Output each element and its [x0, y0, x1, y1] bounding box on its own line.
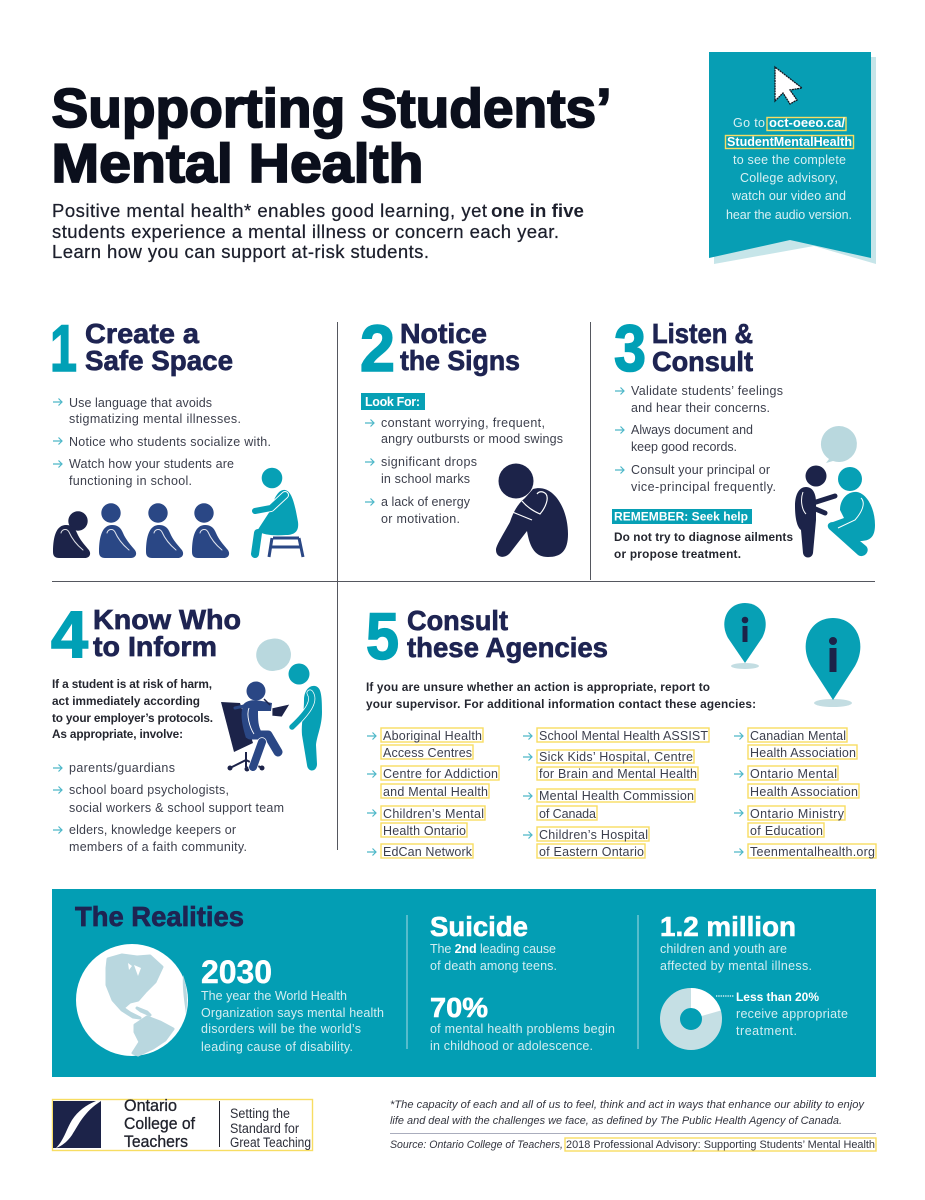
agency list column 1: EdCan Network	[383, 845, 473, 859]
logo: Ontario	[124, 1096, 177, 1115]
panel: 1 create a safe space	[50, 311, 303, 558]
list: significant drops	[381, 455, 477, 469]
stat: 1.2 million: children and youth are	[660, 942, 787, 956]
panel: 3 listen and consult	[612, 311, 875, 561]
title: Mental Health	[52, 132, 423, 194]
stat: 70%: 70%	[430, 992, 488, 1023]
logo: College of	[124, 1114, 195, 1133]
list: Consult your principal or	[631, 463, 770, 477]
list	[365, 416, 563, 526]
list: or motivation.	[381, 512, 460, 526]
intro text: As appropriate, involve:	[52, 727, 183, 741]
list: Validate students’ feelings	[631, 384, 783, 398]
ribbon text: Go to	[733, 116, 765, 130]
footnote	[390, 1099, 866, 1127]
agency list column 3: Health Association	[750, 746, 856, 760]
ribbon text: StudentMentalHealth	[727, 135, 852, 149]
stat: 2030: 2030	[201, 954, 272, 990]
panel: the realities	[52, 889, 876, 1077]
agency list column 1: Children’s Mental	[383, 807, 484, 821]
footnote: life and deal with the challenges we face, as defined by The Public Health Agency of Canada.	[390, 1115, 842, 1127]
heading	[400, 318, 520, 376]
stat: 1.2 million	[660, 911, 812, 973]
list: Watch how your students are	[69, 457, 234, 471]
stat: suicide: Suicide	[430, 911, 528, 942]
stat: 70%: in childhood or adolescence.	[430, 1039, 593, 1053]
heading: Consult	[407, 605, 508, 636]
source line: Source: Ontario College of Teachers,	[390, 1139, 563, 1151]
stat: less than 20%: treatment.	[736, 1024, 797, 1038]
agency list column 3	[734, 728, 876, 859]
stat: 2030: disorders will be the world’s	[201, 1022, 361, 1036]
stat: suicide: The 2nd leading cause	[430, 942, 556, 956]
agency list column 2: Children’s Hospital	[539, 828, 648, 842]
logo: Great Teaching	[230, 1135, 311, 1150]
icon: large info pin	[806, 618, 860, 707]
heading: the Signs	[400, 345, 520, 376]
ribbon text: watch our video and	[731, 189, 846, 203]
heading: Listen &	[652, 318, 753, 349]
heading: these Agencies	[407, 632, 608, 663]
agency list column 3: Health Association	[750, 785, 858, 799]
stat: 2030: Organization says mental health	[201, 1006, 384, 1020]
look for label: Look For:	[365, 395, 420, 409]
list: parents/guardians	[69, 761, 175, 775]
stat: less than 20%: Less than 20%	[736, 990, 819, 1004]
stat: less than 20%	[736, 990, 848, 1038]
list: functioning in school.	[69, 474, 192, 488]
panel: 4 know who to inform	[51, 597, 322, 854]
list: Notice who students socialize with.	[69, 435, 271, 449]
remember label: REMEMBER: Seek help	[614, 510, 748, 524]
stat: suicide	[430, 911, 557, 973]
list	[615, 384, 783, 494]
heading	[93, 604, 241, 662]
ribbon text: College advisory,	[740, 171, 838, 185]
icon: small info pin	[724, 603, 766, 669]
title: Supporting Students’	[52, 77, 612, 139]
intro text	[52, 677, 213, 741]
icon: globe	[76, 944, 188, 1056]
agency list column 1: Aboriginal Health	[383, 729, 482, 743]
intro text: to your employer’s protocols.	[52, 711, 213, 725]
icon: mouse cursor	[775, 67, 802, 104]
list: stigmatizing mental illnesses.	[69, 412, 241, 426]
number 2: 2	[360, 311, 395, 385]
intro text: act immediately according	[52, 694, 200, 708]
stat: 2030	[201, 954, 384, 1054]
icon: counsellor and student	[221, 664, 322, 772]
agency list column 3: Ontario Ministry	[750, 807, 845, 821]
list: social workers & school support team	[69, 801, 284, 815]
agency list column 2: of Eastern Ontario	[539, 845, 644, 859]
subtitle text block: Positive mental health* enables good learning, yet	[52, 200, 487, 221]
list: members of a faith community.	[69, 840, 247, 854]
icon: teacher on stool	[255, 468, 303, 557]
heading: Create a	[85, 318, 200, 349]
stat: suicide: of death among teens.	[430, 959, 557, 973]
intro text	[366, 680, 756, 711]
list: elders, knowledge keepers or	[69, 823, 236, 837]
logo: Teachers	[124, 1132, 188, 1151]
source line	[390, 1138, 876, 1151]
number 1: 1	[50, 311, 77, 385]
agency list column 3: of Education	[750, 824, 823, 838]
agency list column 2: School Mental Health ASSIST	[539, 729, 708, 743]
list: keep good records.	[631, 440, 737, 454]
subtitle text block	[52, 200, 584, 262]
heading	[652, 318, 753, 377]
subtitle text block: one in five	[491, 201, 584, 221]
icon: speech bubble	[256, 639, 291, 671]
warning text: Do not try to diagnose ailments	[614, 530, 793, 544]
panel: 2 notice the signs	[360, 311, 568, 557]
agency list column 1: Access Centres	[383, 746, 472, 760]
agency list column 2: of Canada	[539, 807, 596, 821]
list: school board psychologists,	[69, 783, 229, 797]
heading: The Realities	[75, 901, 244, 932]
footnote: *The capacity of each and all of us to feel, think and act in ways that enhance our ability to enjoy	[390, 1099, 866, 1111]
agency list column 1: Centre for Addiction	[383, 767, 498, 781]
heading: Safe Space	[85, 345, 233, 376]
ribbon callout	[709, 52, 876, 264]
title	[52, 77, 612, 194]
list	[53, 761, 284, 854]
ribbon text: to see the complete	[733, 153, 846, 167]
ribbon text	[726, 116, 854, 222]
logo: Setting the	[230, 1106, 290, 1121]
subtitle text block: Learn how you can support at-risk students.	[52, 241, 429, 262]
list: a lack of energy	[381, 495, 471, 509]
number 5: 5	[366, 599, 399, 673]
subtitle text block: students experience a mental illness or concern each year.	[52, 221, 559, 242]
list: constant worrying, frequent,	[381, 416, 545, 430]
agency list column 3: Ontario Mental	[750, 767, 837, 781]
intro text: your supervisor. For additional information contact these agencies:	[366, 697, 756, 711]
logo: Standard for	[230, 1121, 299, 1136]
stat: 70%	[430, 992, 615, 1053]
icon: two people talking	[795, 466, 875, 558]
agency list column 2	[523, 728, 709, 859]
agency list column 3: Teenmentalhealth.org	[750, 845, 875, 859]
heading: Notice	[400, 318, 487, 349]
warning text	[614, 530, 793, 561]
stat: 2030: The year the World Health	[201, 989, 347, 1003]
icon: speech bubble	[821, 426, 857, 463]
list: vice-principal frequently.	[631, 480, 776, 494]
donut chart	[670, 988, 734, 1040]
logo	[52, 1096, 312, 1151]
list: and hear their concerns.	[631, 401, 770, 415]
agency list column 2: for Brain and Mental Health	[539, 767, 697, 781]
heading	[407, 605, 608, 663]
panel: 5 consult these agencies	[366, 599, 876, 859]
intro text: If you are unsure whether an action is appropriate, report to	[366, 680, 710, 694]
agency list column 2: Mental Health Commission	[539, 789, 694, 803]
agency list column 1: Health Ontario	[383, 824, 466, 838]
heading	[85, 318, 233, 376]
icon: seated students	[53, 503, 229, 558]
agency list column 1: and Mental Health	[383, 785, 488, 799]
stat: 1.2 million: affected by mental illness.	[660, 959, 812, 973]
stat: 70%: of mental health problems begin	[430, 1022, 615, 1036]
list: Always document and	[631, 423, 753, 437]
agency list column 1	[367, 728, 499, 859]
list: Use language that avoids	[69, 396, 212, 410]
heading: Know Who	[93, 604, 241, 635]
intro text: If a student is at risk of harm,	[52, 677, 212, 691]
icon: sad student	[496, 464, 568, 557]
ribbon text: hear the audio version.	[726, 208, 852, 222]
agency list column 3: Canadian Mental	[750, 729, 846, 743]
list: in school marks	[381, 472, 470, 486]
number 3: 3	[614, 311, 646, 385]
number 4: 4	[51, 597, 88, 671]
heading: Consult	[652, 346, 753, 377]
ribbon text: oct-oeeo.ca/	[769, 116, 846, 130]
source line: 2018 Professional Advisory: Supporting Students’ Mental Health	[566, 1139, 875, 1151]
stat: 1.2 million: 1.2 million	[660, 911, 796, 942]
stat: 2030: leading cause of disability.	[201, 1040, 353, 1054]
agency list column 2: Sick Kids’ Hospital, Centre	[539, 750, 693, 764]
section dividers	[52, 322, 875, 850]
warning text: or propose treatment.	[614, 547, 741, 561]
stat: less than 20%: receive appropriate	[736, 1007, 848, 1021]
list: angry outbursts or mood swings	[381, 432, 563, 446]
heading: to Inform	[93, 631, 217, 662]
list	[53, 396, 271, 488]
